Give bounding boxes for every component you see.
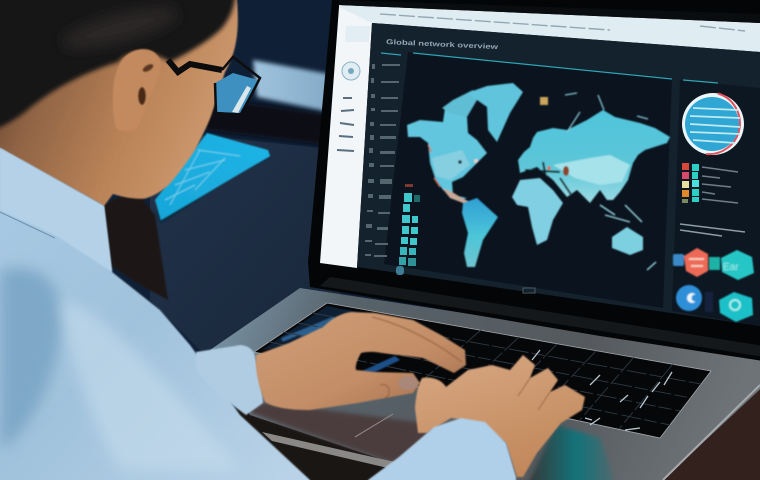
hot spots (563, 166, 569, 176)
hair (0, 0, 236, 135)
palm rest reflection (248, 402, 440, 470)
screen (320, 0, 760, 326)
left hand (256, 312, 466, 410)
dashboard title: Global network overview (386, 39, 499, 51)
laptop base (210, 288, 760, 480)
toolbar text lines (380, 14, 745, 31)
blurred blue shelf in background (253, 60, 340, 114)
left list rows (365, 64, 400, 257)
keyboard (254, 303, 711, 438)
key rows and columns (269, 313, 701, 429)
white sidebar (320, 7, 372, 268)
southeast asia islands (600, 205, 656, 270)
glasses (168, 57, 260, 115)
wooden table bottom right (650, 378, 760, 480)
trackpad edge (355, 414, 393, 437)
central america (442, 188, 470, 203)
lens (215, 73, 258, 113)
left cuff (196, 345, 263, 415)
north america (407, 108, 487, 200)
arctic islands (442, 90, 477, 117)
keyboard blue reflection (262, 306, 358, 350)
right cuff (368, 418, 516, 480)
caption lines (680, 224, 745, 236)
desk back edge (205, 97, 340, 147)
header accent lines (381, 53, 718, 83)
tablet on desk (155, 133, 270, 224)
legend (680, 163, 745, 236)
circle stripes (690, 108, 740, 143)
legend text lines (702, 167, 738, 203)
right column (672, 80, 760, 326)
dashboard icons (673, 248, 754, 322)
right hand (415, 355, 585, 477)
front edge (262, 432, 395, 469)
australia (612, 227, 643, 255)
ponytail hair (103, 190, 168, 300)
laptop lid bezel (308, 0, 760, 362)
person (0, 0, 310, 480)
central asia highlight (553, 155, 630, 185)
desk surface (150, 130, 340, 355)
neck and face (0, 0, 238, 206)
bottom scroll marker (396, 266, 404, 275)
dark dashboard panel (357, 23, 760, 326)
key highlights (532, 350, 672, 430)
glasses temple (168, 60, 222, 72)
frame (215, 57, 260, 115)
sidebar globe icon (342, 62, 360, 80)
shirt shading (0, 268, 62, 450)
teal status squares (399, 184, 420, 266)
blue circle icon (676, 285, 702, 311)
finger shading (372, 317, 462, 362)
tablet screen lines (165, 150, 240, 205)
map area (384, 52, 672, 308)
collar (0, 148, 112, 272)
shirt (0, 137, 310, 480)
teal camera icon (719, 292, 753, 322)
right base edge (663, 385, 760, 480)
donut status circle (682, 93, 744, 155)
africa (512, 178, 563, 245)
teal hexagon icon (721, 250, 754, 280)
mediterranean and gulf (525, 162, 572, 196)
white app toolbar (339, 5, 760, 52)
small islands (565, 93, 648, 132)
hair sheen (58, 0, 182, 57)
world map (407, 83, 670, 270)
south america (462, 198, 498, 267)
coral hexagon icon (684, 248, 708, 277)
dashboard icons: Ear (723, 262, 739, 273)
eurasia (518, 110, 670, 203)
greenland (467, 83, 523, 142)
dark under laptop (225, 405, 400, 480)
ear (113, 49, 161, 131)
teal screen reflection on base (525, 425, 618, 480)
sidebar labels (337, 98, 354, 151)
thumb nail (398, 376, 418, 390)
knuckle lines (518, 378, 550, 410)
